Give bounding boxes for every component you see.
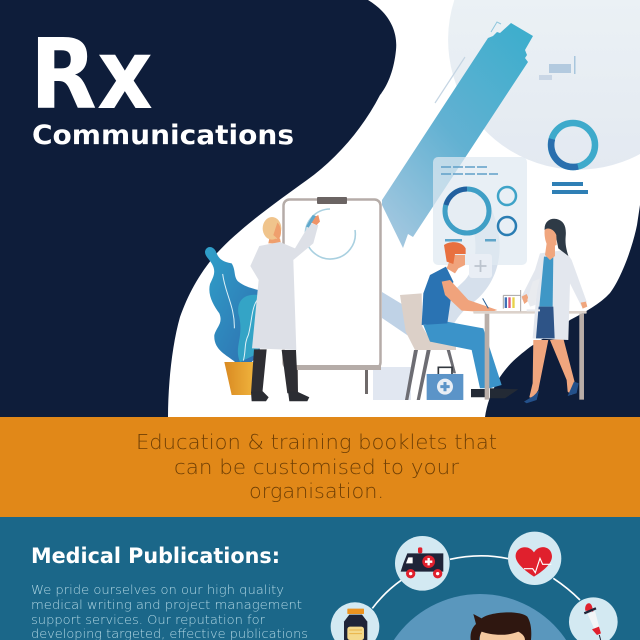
title: Rx: Rx: [30, 18, 153, 131]
illustration: diagonal blue stripe: [382, 23, 533, 248]
panel: chart card: [433, 157, 527, 265]
illustration: person in circle: [394, 594, 566, 640]
icon: test tubes: [503, 290, 521, 311]
banner text: can be customised to your: [174, 455, 460, 479]
illustration: seated man: [422, 242, 518, 398]
illustration: woman in lab coat: [521, 219, 587, 403]
illustration: faint chart marks: [435, 22, 576, 103]
body text: [31, 582, 308, 640]
icon: two legend bars: [552, 182, 588, 194]
illustration: plant in pot: [205, 247, 260, 395]
panel: orange banner: [0, 417, 640, 517]
illustration: doctor at whiteboard: [250, 215, 320, 401]
heading: Medical Publications: Medical Publications:: [31, 544, 280, 569]
illustration: pale circle backdrop: [448, 0, 640, 170]
body text: We pride ourselves on our high quality: [31, 582, 284, 597]
icon: ambulance: [395, 536, 450, 591]
icon: medical kit: [427, 367, 463, 400]
body text: support services. Our reputation for: [31, 612, 266, 627]
heading: Communications: Communications: [32, 120, 294, 151]
panel: medical publications: [0, 517, 640, 640]
banner text: [136, 430, 497, 503]
banner text: organisation.: [249, 479, 384, 503]
icon: medicine bottle: [331, 602, 379, 640]
illustration: whiteboard: [284, 197, 381, 395]
illustration: chair: [400, 293, 456, 400]
icon: dropper: [569, 597, 618, 640]
icon: plus card: [469, 254, 492, 278]
body text: medical writing and project management: [31, 597, 302, 612]
icon: donut chart on circle: [551, 123, 595, 167]
icon: heart with pulse: [508, 532, 561, 585]
illustration: table: [473, 311, 587, 400]
illustration: curved pale band: [428, 210, 500, 340]
icon: microscope: [527, 278, 540, 311]
illustration: lower stripe pieces: [373, 292, 428, 400]
banner text: Education & training booklets that: [136, 430, 497, 454]
panel: hero background: [0, 0, 640, 417]
illustration: connecting arcs: [372, 556, 580, 608]
